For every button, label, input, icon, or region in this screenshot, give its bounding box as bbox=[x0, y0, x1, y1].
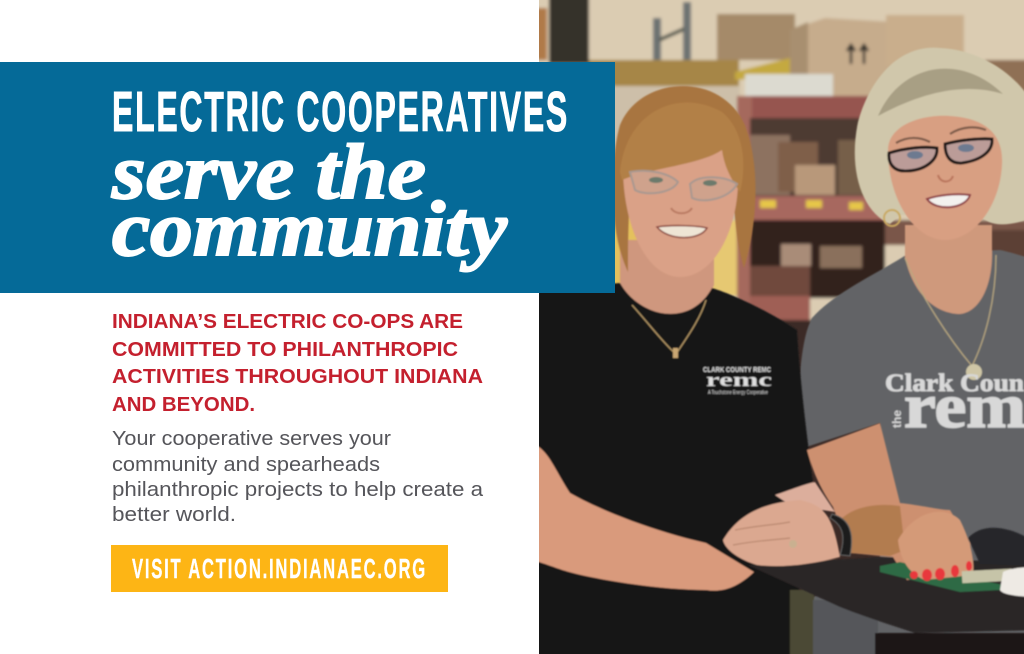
heading: community: community bbox=[112, 185, 507, 272]
arm of right woman bbox=[807, 423, 973, 580]
warehouse background with shelves and boxes bbox=[539, 0, 1024, 598]
body text: Your cooperative serves your bbox=[112, 427, 391, 450]
eyes bbox=[649, 177, 663, 183]
shirt: black bbox=[520, 283, 813, 654]
eyebrows bbox=[896, 127, 986, 143]
earring bbox=[884, 210, 900, 226]
shirt logo bbox=[703, 367, 772, 396]
eyes and glasses bbox=[630, 171, 737, 200]
finger lines bbox=[733, 522, 790, 545]
shirt logo: rem bbox=[904, 373, 1024, 441]
face bbox=[622, 150, 738, 276]
fringe bbox=[620, 102, 743, 192]
shirt: gray bbox=[797, 250, 1024, 654]
arm of left woman bbox=[520, 447, 754, 591]
red subheading: COMMITTED TO PHILANTHROPIC bbox=[112, 338, 458, 361]
body text: community and spearheads bbox=[112, 453, 380, 476]
shaded lower arm bbox=[840, 505, 905, 556]
body text: better world. bbox=[112, 503, 236, 526]
forearm behind hand bbox=[775, 482, 835, 512]
necklace bbox=[905, 255, 996, 366]
table bbox=[748, 557, 1024, 633]
shirt logo: remc bbox=[706, 370, 772, 391]
nose bbox=[671, 208, 692, 213]
nose bbox=[938, 175, 953, 182]
button: visit action.indianaec.org bbox=[111, 545, 448, 592]
neck bbox=[905, 225, 992, 314]
white tape roll bbox=[1000, 567, 1024, 597]
phone bbox=[962, 569, 1012, 583]
ring bbox=[789, 540, 797, 548]
glasses bbox=[889, 139, 992, 171]
red subheading: INDIANA’S ELECTRIC CO-OPS ARE bbox=[112, 310, 463, 333]
neck bbox=[620, 240, 714, 316]
red subheading: AND BEYOND. bbox=[112, 393, 255, 416]
table legs and lower shirt of right woman bbox=[790, 590, 814, 654]
button: visit action.indianaec.org: VISIT ACTION.INDIANAEC.ORG bbox=[132, 553, 427, 584]
heading: serve the: serve the bbox=[111, 128, 426, 215]
smile bbox=[657, 226, 707, 238]
shirt logo: A Touchstone Energy Cooperative bbox=[708, 390, 768, 396]
eyes bbox=[907, 151, 923, 159]
panel: blue title banner bbox=[0, 62, 615, 293]
body text: philanthropic projects to help create a bbox=[112, 478, 484, 501]
heading: Electric Cooperatives: ELECTRIC COOPERATIVES bbox=[112, 80, 569, 144]
red subheading: ACTIVITIES THROUGHOUT INDIANA bbox=[112, 365, 483, 388]
red nails bbox=[910, 561, 972, 581]
body text bbox=[112, 427, 484, 526]
hair shadow bbox=[878, 69, 1003, 116]
woman on the right bbox=[797, 48, 1024, 654]
photo: two co-op employees in a warehouse bbox=[520, 0, 1024, 654]
woman on the left bbox=[520, 86, 1024, 654]
red subheading bbox=[112, 310, 483, 416]
green mat bbox=[880, 562, 1003, 592]
hair bbox=[613, 86, 756, 272]
hand on left bbox=[723, 500, 840, 566]
watch band bbox=[830, 514, 852, 556]
necklace bbox=[632, 300, 706, 354]
shirt logo: CLARK COUNTY REMC bbox=[703, 367, 771, 374]
shirt logo: the bbox=[890, 410, 904, 428]
smile bbox=[927, 194, 970, 207]
hair back bbox=[855, 48, 1024, 224]
face bbox=[888, 116, 1002, 240]
shirt logo bbox=[884, 372, 1024, 430]
shirt logo: Clark Coun bbox=[885, 370, 1024, 397]
mouse bbox=[968, 528, 1024, 566]
hand on right bbox=[898, 512, 973, 580]
